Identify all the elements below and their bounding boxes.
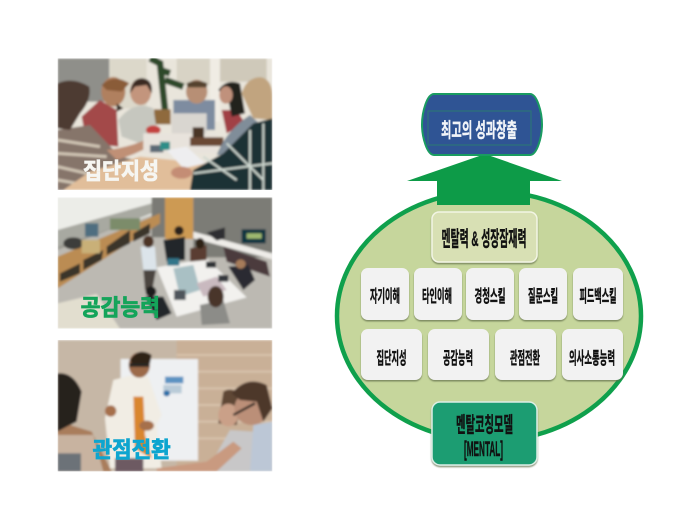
ability box: empathy [428, 329, 489, 380]
ability box: communication: 의사소통능력 [569, 349, 615, 368]
skill box: self-understanding [361, 268, 409, 320]
skill box: listening [466, 268, 514, 320]
box: mental strength and growth potential [432, 212, 537, 262]
goal box: best performance: 최고의 성과창출 [441, 119, 517, 142]
skill box: questioning [519, 268, 567, 320]
arrow: upward to top result [407, 154, 562, 205]
skill box: understanding others: 타인이해 [422, 287, 452, 306]
skill box: listening: 경청스킬 [474, 287, 506, 306]
ability box: shifting perspective: 관점전환 [510, 349, 540, 368]
goal box: best performance [422, 94, 542, 155]
box: mental coaching model: 멘탈코칭모델 [456, 414, 513, 437]
photo label: empathy: 공감능력 [81, 294, 160, 320]
box: mental strength and growth potential: 멘탈력 & 성장잠재력 [442, 228, 526, 251]
skill box: questioning: 질문스킬 [528, 287, 558, 306]
photo panel: team meeting [58, 58, 272, 190]
skill box: feedback: 피드백스킬 [580, 287, 616, 306]
skill box: feedback [573, 268, 623, 320]
ability box: shifting perspective [495, 329, 556, 380]
box: mental coaching model: [MENTAL] [464, 438, 503, 461]
box: mental coaching model [432, 402, 537, 465]
skill box: understanding others [414, 268, 462, 320]
photo panel: presenter at whiteboard [58, 340, 272, 472]
photo label: collective intelligence: 집단지성 [83, 158, 159, 184]
photo panel: office from above [58, 197, 272, 329]
ability box: communication [562, 329, 623, 380]
ability box: collective intelligence [361, 329, 422, 380]
photo label: shifting perspective: 관점전환 [93, 438, 171, 463]
large oval container [337, 191, 641, 441]
ability box: collective intelligence: 집단지성 [376, 349, 406, 368]
ability box: empathy: 공감능력 [443, 349, 473, 368]
diagram: mental coaching model [337, 94, 641, 465]
skill box: self-understanding: 자기이해 [370, 287, 400, 306]
